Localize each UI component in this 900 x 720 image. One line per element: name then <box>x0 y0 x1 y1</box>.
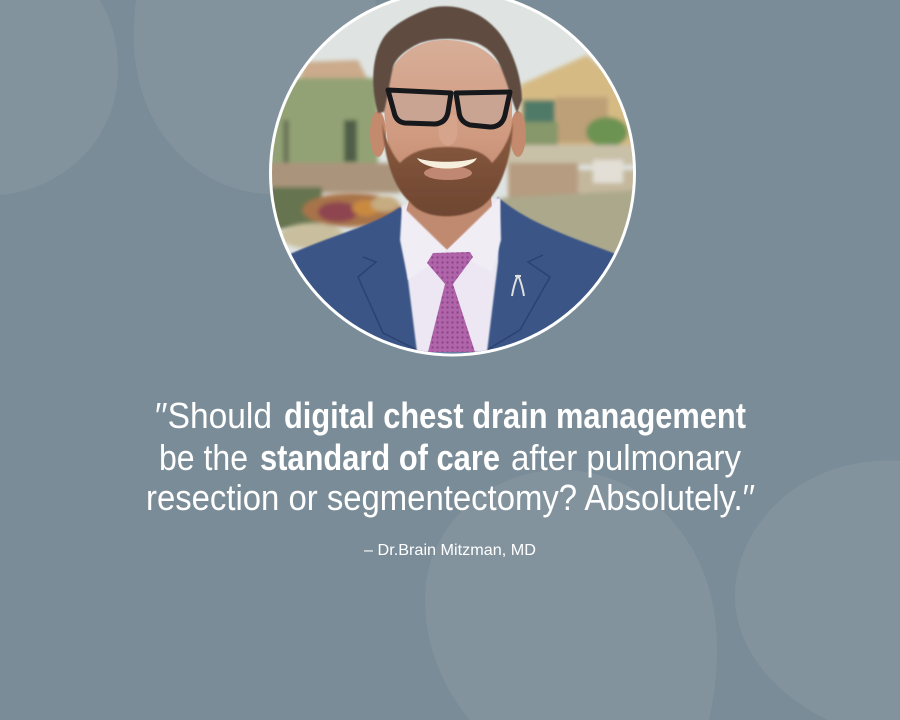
flower bed <box>280 193 402 249</box>
ears <box>370 111 386 157</box>
quote line 1: ′′Should <box>155 395 272 436</box>
quote line 2: be the <box>159 437 248 478</box>
smile <box>417 158 477 168</box>
quote line 2: after pulmonary <box>511 437 741 478</box>
quote line 3: resection or segmentectomy? Absolutely.′′ <box>146 477 755 518</box>
glasses <box>388 90 510 127</box>
face <box>384 40 512 164</box>
collar <box>400 198 501 280</box>
tie <box>427 252 475 352</box>
lapel pin <box>512 275 524 296</box>
nose <box>438 127 458 146</box>
quote line 2: standard of care <box>260 437 500 478</box>
decorative blob: bottom centre <box>425 470 717 720</box>
portrait photo <box>266 0 640 360</box>
quote line 2 <box>159 437 741 478</box>
lapel seams <box>358 255 550 350</box>
hair <box>373 6 522 113</box>
quote line 1: digital chest drain management <box>284 395 746 436</box>
neck <box>406 196 492 250</box>
shirt <box>402 198 500 352</box>
decorative blob: top left <box>0 0 118 195</box>
decorative blob: bottom right <box>735 461 900 720</box>
quote text <box>146 395 755 518</box>
suit jacket <box>290 196 614 354</box>
photo background scenery <box>266 0 640 360</box>
quote line 1 <box>155 395 746 436</box>
attribution: – Dr.Brain Mitzman, MD <box>364 542 536 559</box>
beard <box>382 122 513 216</box>
decorative blob: top centre <box>134 0 400 195</box>
head <box>370 6 526 216</box>
lower lip <box>424 166 472 180</box>
